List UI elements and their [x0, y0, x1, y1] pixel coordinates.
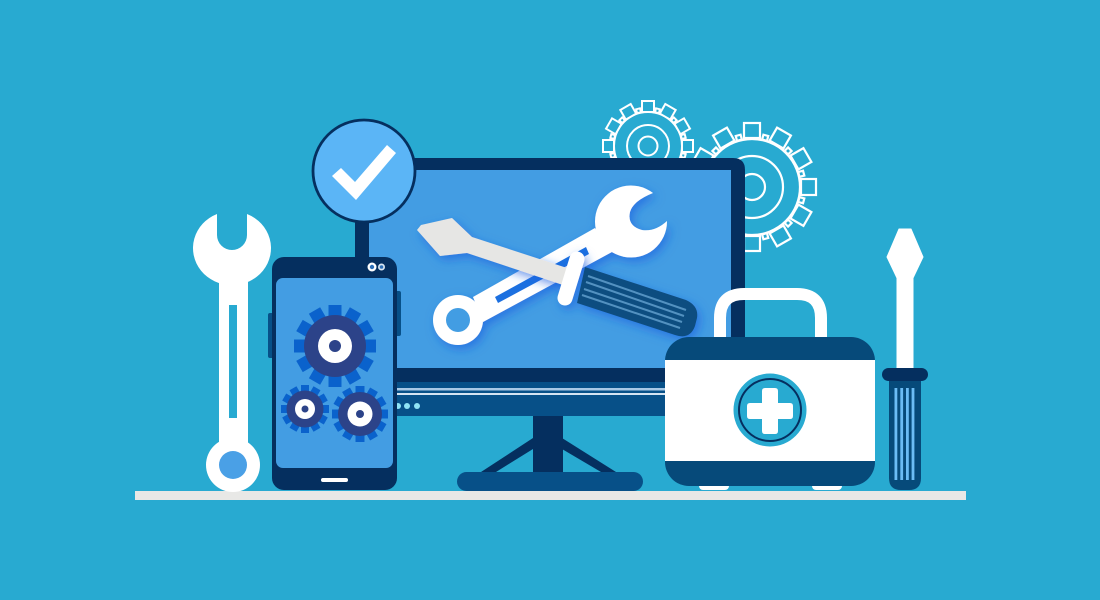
gear small right: [332, 386, 388, 442]
gear large: [294, 305, 376, 387]
screwdriver collar: [565, 259, 577, 298]
screwdriver on screen: [417, 218, 697, 336]
icon: medical cross: [747, 388, 793, 434]
phone cameras: [368, 262, 385, 272]
icon: check mark: [332, 145, 396, 200]
spanner left: [193, 214, 271, 492]
outline gear right: [688, 123, 816, 251]
screwdriver blade: [887, 229, 923, 369]
phone body: [272, 257, 397, 490]
toolbox body: [665, 337, 875, 486]
monitor frame: [355, 158, 745, 382]
screwdriver shaft: [417, 218, 567, 285]
toolbox feet: [699, 480, 729, 490]
monitor screen: [369, 170, 731, 368]
monitor: [355, 158, 745, 491]
screwdriver handle: [577, 267, 697, 336]
screwdriver stripes: [894, 388, 914, 480]
phone: [268, 257, 401, 490]
toolbox badge: [734, 374, 806, 446]
monitor chin: [355, 382, 685, 416]
toolbox band: [665, 360, 875, 461]
outline gear left: [603, 101, 693, 180]
phone speaker: [321, 478, 348, 482]
gear small left: [281, 385, 329, 433]
screwdriver handle: [889, 375, 921, 490]
magnifier stalk: [355, 215, 369, 265]
screwdriver right: [882, 229, 928, 490]
first aid toolbox: [665, 294, 875, 490]
monitor stand: [481, 414, 616, 474]
check circle: [313, 120, 415, 222]
screwdriver collar: [882, 368, 928, 381]
wrench on screen: [433, 185, 667, 345]
phone screen: [276, 278, 393, 468]
toolbox handle: [720, 294, 821, 340]
monitor base: [457, 472, 643, 491]
phone buttons: [268, 313, 276, 358]
shelf: [135, 491, 966, 500]
